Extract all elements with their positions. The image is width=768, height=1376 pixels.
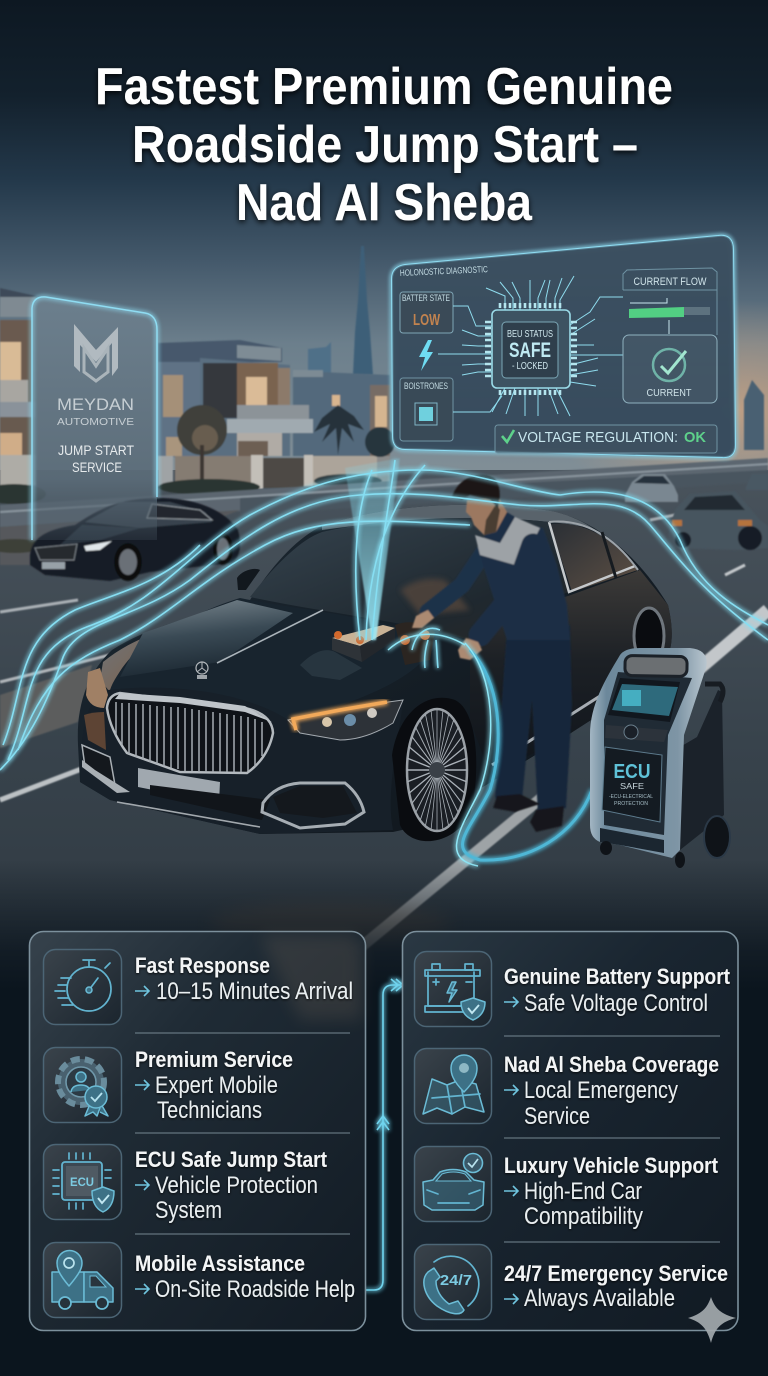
heading: Genuine Battery Support bbox=[504, 964, 730, 989]
ECU safe label bbox=[602, 747, 662, 822]
ECU safe label: -ECU-ELECTRICAL bbox=[609, 794, 653, 800]
heading: Luxury Vehicle Support bbox=[504, 1153, 718, 1178]
ECU safe label: ECU bbox=[614, 761, 650, 783]
illustration: background sedans on the right bbox=[625, 474, 768, 550]
illustration: black sedan on the left bbox=[30, 498, 240, 581]
ECU chip bbox=[485, 303, 577, 395]
description: Safe Voltage Control bbox=[524, 990, 708, 1017]
logo text: Meydan: MEYDAN bbox=[57, 395, 134, 414]
dark base below the fade bbox=[0, 990, 768, 1376]
arrow bbox=[504, 1085, 518, 1095]
logo panel: Meydan Automotive Jump Start Service bbox=[32, 297, 157, 540]
right villa bbox=[293, 370, 390, 456]
feature: Nad Al Sheba Coverage: Service bbox=[524, 1103, 590, 1130]
machine wheels bbox=[704, 816, 730, 858]
feature: Fast Response bbox=[44, 950, 353, 1024]
lower door chrome bbox=[492, 696, 600, 765]
icon: ECU chip with shield: ECU bbox=[70, 1175, 94, 1189]
current status box: CURRENT bbox=[646, 387, 692, 399]
arrow bbox=[504, 1294, 518, 1304]
front arm bbox=[480, 545, 533, 635]
grille bbox=[107, 693, 273, 773]
ECU chip: SAFE bbox=[509, 339, 551, 362]
voltage regulation status bbox=[495, 425, 717, 453]
title line 2: Roadside Jump Start – bbox=[132, 116, 638, 174]
lightning bolt bbox=[419, 340, 433, 371]
ECU safe label: SAFE bbox=[620, 781, 644, 791]
illustration: distant skyline bbox=[308, 246, 764, 450]
rear handle bbox=[705, 684, 723, 702]
heading: Nad Al Sheba Coverage bbox=[504, 1052, 719, 1077]
battery state box bbox=[400, 292, 453, 333]
panel: right features bbox=[402, 932, 738, 1330]
licence plate bbox=[138, 768, 220, 803]
heading: Premium Service bbox=[135, 1047, 293, 1072]
trees and hedges bbox=[158, 405, 395, 495]
description: Always Available bbox=[524, 1285, 675, 1312]
illustration: villas behind the road bbox=[0, 288, 395, 504]
current status box bbox=[623, 335, 717, 403]
arrow bbox=[135, 1284, 149, 1294]
voltage regulation status: VOLTAGE REGULATION: bbox=[518, 429, 678, 446]
description: High-End Car bbox=[524, 1178, 642, 1205]
icon: ECU chip with shield bbox=[44, 1144, 122, 1220]
dark front inset bbox=[604, 672, 692, 835]
feature: Luxury Vehicle Support: Compatibility bbox=[524, 1203, 643, 1230]
icon: phone with 24/7 clock bbox=[414, 1244, 492, 1320]
title line 1: Fastest Premium Genuine bbox=[95, 58, 673, 116]
processor traces bbox=[438, 276, 623, 416]
hood bbox=[110, 598, 440, 722]
heading: 24/7 Emergency Service bbox=[504, 1261, 728, 1286]
current flow box: CURRENT FLOW bbox=[634, 276, 707, 288]
boots bbox=[493, 794, 540, 812]
arrow bbox=[504, 1186, 518, 1196]
icon: pin and truck bbox=[44, 1242, 122, 1318]
center villa bbox=[158, 340, 313, 457]
energy beam from battery to holographic panel bbox=[345, 458, 400, 640]
logo text: Jump Start: JUMP START bbox=[58, 442, 134, 458]
feature: ECU Safe Jump Start: System bbox=[155, 1197, 222, 1224]
glowing energy streams bbox=[0, 460, 768, 770]
feature: Genuine Battery Support bbox=[414, 952, 730, 1026]
heading: Fast Response bbox=[135, 953, 270, 978]
icon: map with pin bbox=[414, 1048, 492, 1124]
pillar and rear side windows bbox=[549, 521, 638, 592]
current flow box bbox=[623, 268, 717, 335]
description: 10–15 Minutes Arrival bbox=[156, 978, 353, 1005]
door side panels bbox=[470, 570, 672, 775]
technician in uniform bbox=[412, 475, 572, 832]
icon: stopwatch bbox=[44, 950, 122, 1024]
rear wheel bbox=[634, 608, 664, 664]
machine body bbox=[590, 648, 707, 858]
feature: Premium Service: Technicians bbox=[157, 1097, 262, 1124]
sparkle watermark bbox=[688, 1297, 736, 1343]
arrow bbox=[504, 997, 518, 1007]
left bumper tone bbox=[84, 712, 106, 750]
feature: Mobile Assistance bbox=[44, 1242, 355, 1318]
machine handle bbox=[625, 655, 687, 677]
front fascia bbox=[80, 688, 403, 834]
lower bumper chrome and intakes bbox=[82, 745, 364, 828]
feature: 24/7 Emergency Service bbox=[414, 1244, 728, 1320]
side mirror bbox=[237, 569, 260, 590]
glowing charging cable bbox=[388, 634, 592, 866]
windshield bbox=[250, 518, 568, 640]
description: Expert Mobile bbox=[155, 1072, 278, 1099]
ECU chip: - LOCKED bbox=[512, 361, 548, 372]
grey chest panel bbox=[475, 517, 540, 565]
front wheel bbox=[392, 698, 476, 841]
illustration: guard rail and road markings bbox=[0, 458, 768, 952]
description: On-Site Roadside Help bbox=[155, 1276, 355, 1303]
title line 3: Nad Al Sheba bbox=[236, 174, 533, 232]
back arm bbox=[428, 552, 484, 612]
boundary walls and gate bbox=[158, 455, 390, 489]
icon: car with check bbox=[414, 1146, 492, 1222]
holo heading: HOLONOSTIC DIAGNOSTIC bbox=[400, 264, 488, 278]
icon: phone with 24/7 clock: 24/7 bbox=[440, 1273, 472, 1289]
arrow bbox=[135, 1080, 149, 1090]
heading: ECU Safe Jump Start bbox=[135, 1147, 327, 1172]
battery state box: LOW bbox=[413, 312, 441, 329]
boost module box: BOISTRONES bbox=[404, 381, 448, 391]
title bbox=[95, 58, 673, 232]
arrow bbox=[135, 1180, 149, 1190]
ECU safe label: PROTECTION bbox=[614, 801, 648, 807]
connector arrow between panels bbox=[364, 979, 403, 1290]
torso bbox=[478, 515, 570, 640]
description: Vehicle Protection bbox=[155, 1172, 318, 1199]
left headlight bbox=[86, 668, 108, 708]
head bbox=[466, 498, 507, 535]
car silhouette bbox=[78, 505, 672, 834]
feature: ECU Safe Jump Start bbox=[44, 1144, 327, 1224]
machine screen bbox=[608, 678, 680, 722]
arrow bbox=[135, 986, 149, 996]
logo text: Automotive: AUTOMOTIVE bbox=[57, 416, 134, 428]
exposed battery bbox=[332, 622, 435, 665]
icon: gear with badge bbox=[44, 1048, 122, 1122]
battery state box: BATTER STATE bbox=[402, 293, 450, 303]
feature: Premium Service bbox=[44, 1047, 293, 1124]
logo text: Service: SERVICE bbox=[72, 459, 122, 475]
left fender bbox=[100, 632, 160, 692]
description: Local Emergency bbox=[524, 1077, 678, 1104]
collar bbox=[496, 508, 515, 545]
boost module box bbox=[400, 378, 453, 441]
hand on cable bbox=[458, 638, 482, 660]
ECU chip: BEU STATUS bbox=[507, 329, 553, 340]
cabin seat glow bbox=[400, 579, 470, 615]
dividers bbox=[504, 1036, 720, 1242]
holographic diagnostic panel bbox=[392, 236, 735, 457]
voltage regulation status: OK bbox=[684, 429, 706, 446]
panel: left features bbox=[30, 932, 366, 1330]
feature: Nad Al Sheba Coverage bbox=[414, 1048, 719, 1130]
roof sheen bbox=[322, 505, 622, 552]
emblem bbox=[196, 662, 208, 679]
heading: Mobile Assistance bbox=[135, 1251, 305, 1276]
logo mark: MM monogram bbox=[74, 324, 118, 381]
engine parts bbox=[300, 650, 362, 680]
hand reaching the battery bbox=[412, 610, 434, 628]
road reflections bbox=[210, 903, 450, 947]
legs bbox=[495, 625, 572, 815]
icon: battery with shield bbox=[414, 952, 492, 1026]
dividers bbox=[135, 1033, 350, 1234]
main car: black luxury sedan bbox=[78, 505, 672, 841]
headlight bbox=[288, 700, 403, 740]
feature: Luxury Vehicle Support bbox=[414, 1146, 718, 1230]
machine side bbox=[680, 690, 724, 850]
far-left villa bbox=[0, 288, 46, 504]
machine controls bbox=[605, 725, 668, 742]
jump start machine bbox=[590, 648, 730, 868]
dark base fading behind the cards bbox=[0, 860, 768, 990]
lower base bbox=[600, 828, 664, 853]
